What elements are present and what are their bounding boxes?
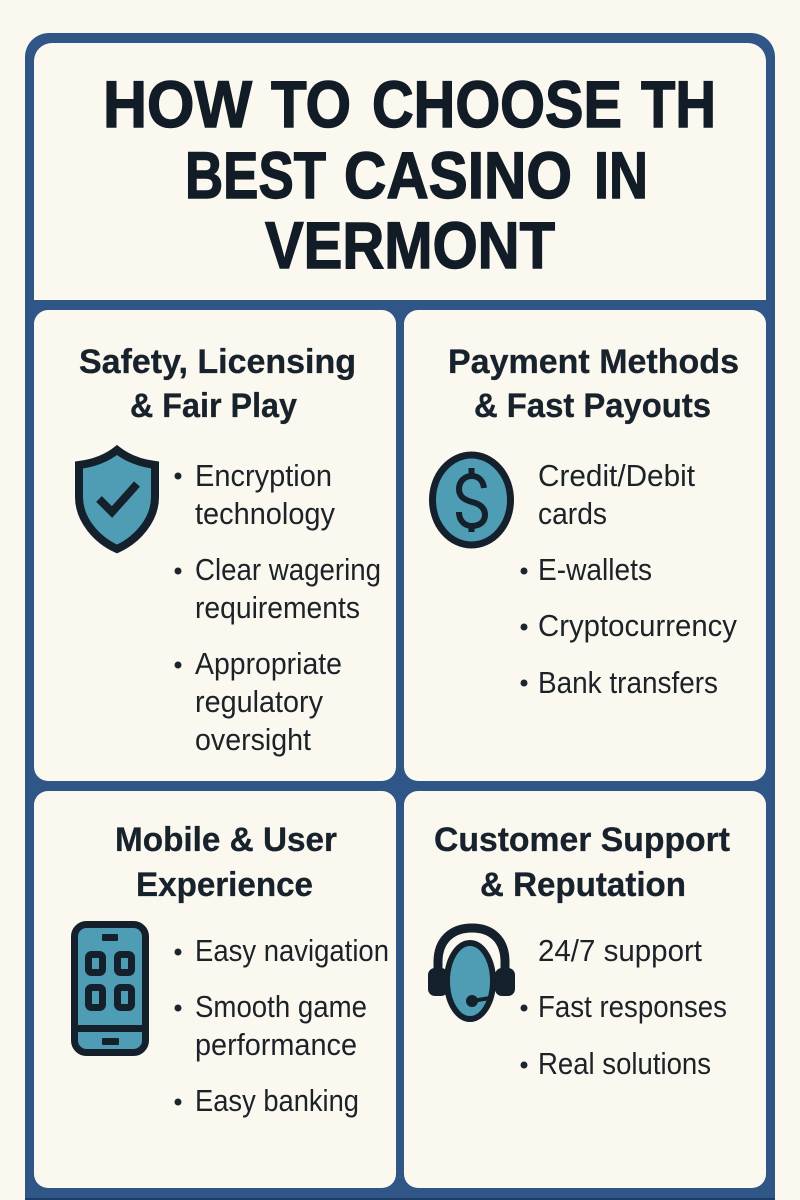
list: mobile items: performance bbox=[195, 1027, 357, 1062]
list: payment items: cards bbox=[538, 496, 607, 531]
list: mobile items bbox=[174, 933, 389, 1118]
list: payment items: E-wallets bbox=[538, 552, 652, 587]
title: HOW bbox=[103, 67, 253, 141]
list: safety items: Encryption bbox=[195, 458, 332, 493]
panel: mobile and user experience bbox=[34, 791, 396, 1188]
list: mobile items: Smooth game bbox=[195, 989, 367, 1024]
icon: dollar coin bbox=[432, 455, 510, 545]
title: BEST bbox=[185, 138, 326, 212]
list: safety items: requirements bbox=[195, 590, 360, 625]
list: support items: Fast responses bbox=[538, 989, 727, 1024]
panel: payment methods and fast payouts bbox=[404, 310, 766, 781]
heading: support: Customer Support bbox=[434, 821, 730, 859]
heading: mobile bbox=[115, 821, 337, 904]
list: safety items: Clear wagering bbox=[195, 552, 381, 587]
heading: mobile: Mobile & User bbox=[115, 821, 337, 859]
list: safety items: regulatory bbox=[195, 684, 323, 719]
title: TH bbox=[641, 67, 716, 141]
title: CHOOSE bbox=[372, 67, 622, 141]
heading: payment bbox=[448, 343, 739, 425]
icon: headset bbox=[428, 928, 515, 1019]
icon: shield with check mark bbox=[79, 450, 155, 549]
list: safety items: oversight bbox=[195, 722, 311, 757]
list: payment items: Credit/Debit bbox=[538, 458, 695, 493]
list: mobile items: Easy navigation bbox=[195, 933, 389, 968]
heading: payment: & Fast Payouts bbox=[474, 387, 711, 425]
title: IN bbox=[594, 138, 648, 212]
title: VERMONT bbox=[265, 208, 555, 282]
list: safety items: Appropriate bbox=[195, 646, 342, 681]
list: safety items bbox=[174, 458, 381, 757]
list: payment items bbox=[520, 458, 737, 700]
title bbox=[103, 67, 716, 282]
list: mobile items: Easy banking bbox=[195, 1083, 359, 1118]
list: payment items: Cryptocurrency bbox=[538, 608, 737, 643]
panel: customer support and reputation bbox=[404, 791, 766, 1188]
list: support items bbox=[520, 933, 727, 1081]
heading: support: & Reputation bbox=[480, 866, 686, 904]
list: support items: Real solutions bbox=[538, 1046, 711, 1081]
heading: payment: Payment Methods bbox=[448, 343, 739, 381]
list: support items: 24/7 support bbox=[538, 933, 702, 968]
panel: safety, licensing and fair play bbox=[34, 310, 396, 781]
list: payment items: Bank transfers bbox=[538, 665, 718, 700]
title: TO bbox=[271, 67, 351, 141]
heading: safety: & Fair Play bbox=[130, 387, 297, 425]
title panel bbox=[34, 43, 766, 300]
icon: smartphone with app grid bbox=[74, 924, 146, 1052]
heading: safety bbox=[79, 343, 356, 425]
heading: support bbox=[434, 821, 730, 904]
heading: safety: Safety, Licensing bbox=[79, 343, 356, 381]
title: CASINO bbox=[344, 138, 572, 212]
list: safety items: technology bbox=[195, 496, 335, 531]
heading: mobile: Experience bbox=[136, 866, 313, 904]
